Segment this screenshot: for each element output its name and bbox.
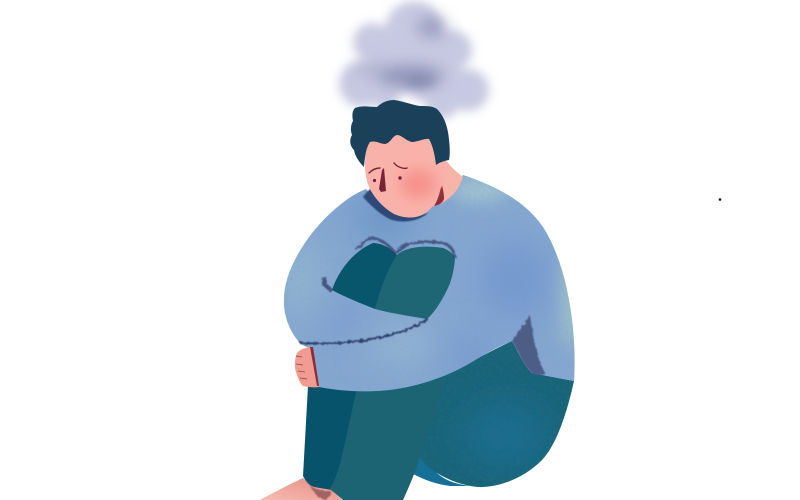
knee gap: dark knee — [332, 243, 397, 309]
back leg — [414, 341, 574, 488]
sweater fold shadows — [300, 238, 455, 343]
foot — [260, 478, 342, 500]
foot shadow — [306, 481, 333, 500]
front leg: near side — [330, 380, 443, 500]
collar shadow — [363, 187, 428, 222]
small dot — [719, 198, 721, 201]
armpit fold shadow — [512, 315, 545, 375]
knee gap: light knee — [375, 247, 455, 319]
face — [365, 135, 450, 218]
sweater — [280, 170, 580, 395]
cloud — [339, 1, 489, 119]
face: eyes, nose and brows — [369, 163, 407, 192]
neck — [430, 163, 463, 207]
front leg: far side — [303, 386, 368, 490]
illustration: sad person under a cloud — [260, 0, 722, 500]
hand — [295, 347, 319, 387]
hair — [350, 100, 450, 167]
